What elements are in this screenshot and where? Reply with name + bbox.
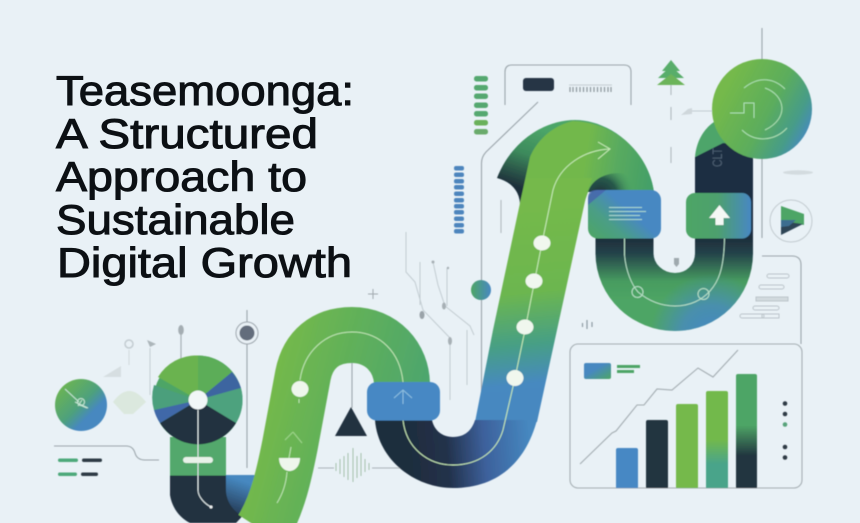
top fold front [520, 121, 654, 215]
lower U ribbon [624, 236, 724, 302]
blue-green dot [471, 280, 491, 300]
large gradient circle [712, 59, 812, 159]
pins and faint icons [103, 325, 184, 414]
bars [616, 374, 757, 488]
thin connector lines [54, 28, 801, 468]
top fold back [497, 120, 654, 205]
icon: tree [657, 60, 685, 85]
blue box with arrow [367, 382, 440, 420]
ribbon white dots [506, 236, 550, 386]
title: Sustainable [56, 196, 295, 243]
lower U inner line [624, 238, 724, 306]
icon: plus mark [368, 289, 378, 299]
play icon [770, 200, 812, 242]
lower U blue tint [624, 236, 724, 302]
right dark riser: CLT [709, 148, 725, 167]
small gradient circle [55, 379, 107, 431]
disc stem line and connector [183, 410, 213, 508]
faint marks [582, 108, 813, 329]
chart frame [570, 344, 802, 488]
title: A Structured [56, 110, 318, 157]
box with up arrow [686, 193, 751, 238]
side dots [783, 401, 787, 460]
circuit traces [406, 232, 474, 400]
box with text lines [588, 190, 661, 238]
arch inner line [277, 332, 403, 503]
icon: small drop [674, 258, 679, 267]
title: Digital Growth [57, 239, 352, 286]
chart legend [584, 363, 640, 379]
lower-left dark bend [170, 437, 262, 523]
green arch ribbon [262, 335, 402, 523]
title [56, 67, 354, 286]
rising ribbon line with arrow [403, 142, 610, 465]
top-left frame contents [523, 78, 612, 92]
dark triangle [335, 407, 367, 436]
blue pills [454, 166, 464, 234]
legend bars lower left [58, 458, 102, 476]
blue-dark U ribbon [375, 420, 537, 488]
trend line [580, 350, 738, 464]
right dark riser [695, 118, 753, 240]
green pills [474, 76, 488, 134]
arch markers [279, 381, 308, 471]
small outline list [740, 274, 789, 318]
shade under fold [588, 173, 654, 192]
target icon [236, 322, 258, 344]
chart panel [570, 344, 802, 488]
title: Teasemoonga: [56, 67, 354, 114]
waveform [318, 448, 400, 482]
title: Approach to [56, 153, 307, 200]
rising ribbon [475, 178, 592, 422]
pie disc [152, 355, 243, 444]
